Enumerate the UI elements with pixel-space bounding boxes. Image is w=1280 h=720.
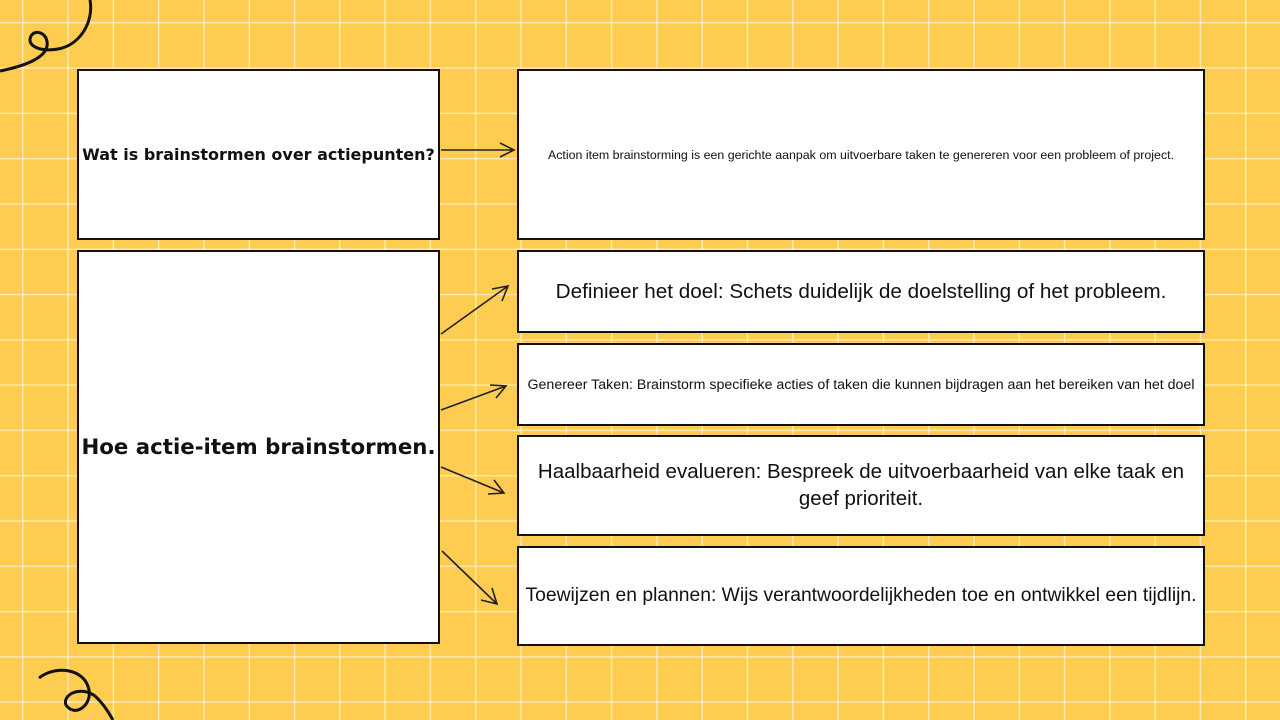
panel: question box bbox=[77, 69, 440, 240]
panel: answer box: Action item brainstorming is een gerichte aanpak om uitvoerbare taken te genereren voor een probleem of project. bbox=[548, 148, 1174, 162]
panel: answer box bbox=[517, 69, 1205, 240]
step 3 bbox=[517, 435, 1205, 536]
panel: how-to box bbox=[77, 250, 440, 644]
step 2: Genereer Taken: Brainstorm specifieke acties of taken die kunnen bijdragen aan het bereiken van het doel bbox=[528, 376, 1194, 392]
step 3: Haalbaarheid evalueren: Bespreek de uitvoerbaarheid van elke taak en geef prioriteit. bbox=[538, 460, 1184, 510]
step 4: Toewijzen en plannen: Wijs verantwoordelijkheden toe en ontwikkel een tijdlijn. bbox=[526, 585, 1196, 606]
step 1: Definieer het doel: Schets duidelijk de doelstelling of het probleem. bbox=[556, 280, 1166, 302]
step 4 bbox=[517, 546, 1205, 646]
panel: question box: Wat is brainstormen over actiepunten? bbox=[82, 145, 435, 164]
panel: how-to box: Hoe actie-item brainstormen. bbox=[81, 434, 436, 460]
step 1 bbox=[517, 250, 1205, 333]
step 2 bbox=[517, 343, 1205, 426]
